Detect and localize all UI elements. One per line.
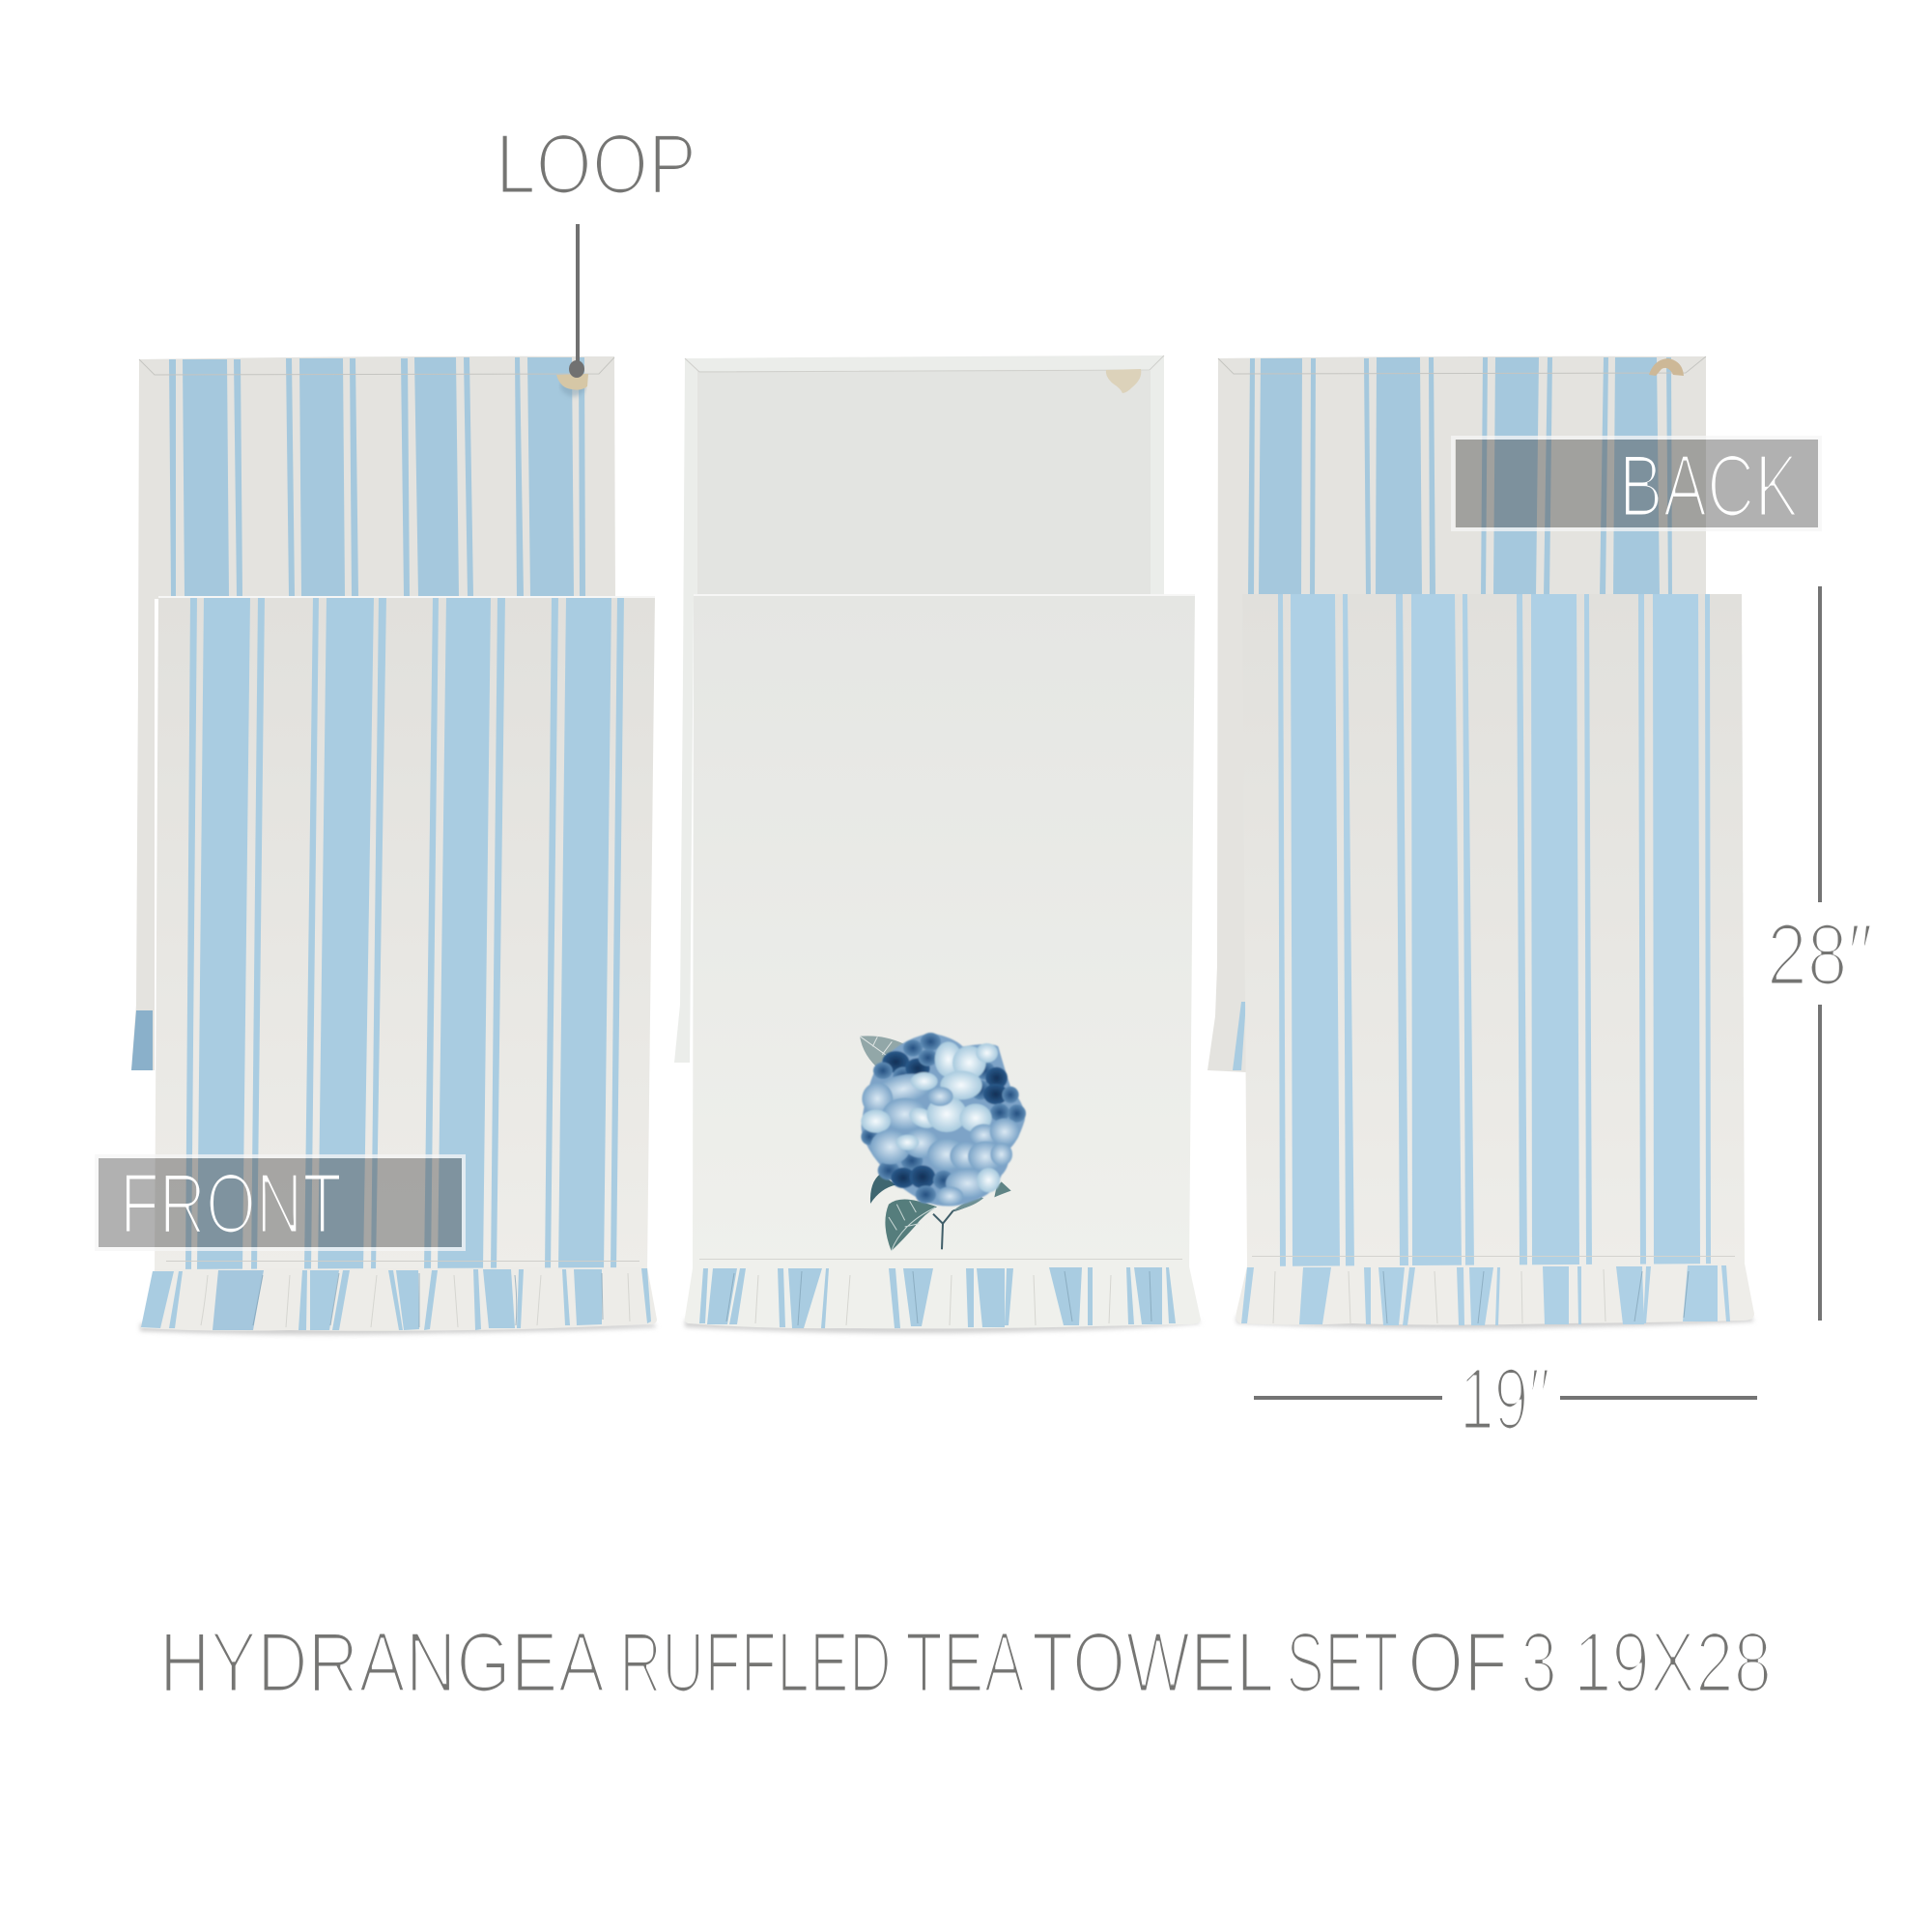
towel 1 front: striped with ruffle bbox=[140, 596, 657, 1335]
title: TOWEL bbox=[1032, 1614, 1274, 1710]
dimension: height 28 inches bbox=[1767, 586, 1873, 1321]
title: SET bbox=[1286, 1614, 1399, 1710]
title: 19X28 bbox=[1574, 1614, 1772, 1710]
dark florets bbox=[861, 1033, 1026, 1204]
title: RUFFLED bbox=[619, 1614, 892, 1710]
towel body bbox=[155, 596, 655, 1271]
towel 2 back: plain bbox=[674, 355, 1164, 1063]
loop tag towel 2 bbox=[1106, 369, 1141, 393]
loop tag towel 3 bbox=[1649, 358, 1684, 376]
dimension: width 19 inches: 19″ bbox=[1460, 1351, 1550, 1448]
badge: FRONT: FRONT bbox=[120, 1155, 342, 1251]
loop leader line with dot bbox=[569, 224, 584, 378]
towel 1 back: striped bbox=[131, 356, 615, 1070]
badge: BACK: BACK bbox=[1619, 438, 1799, 535]
ruffle bbox=[140, 1323, 657, 1335]
dimension: height 28 inches: 28″ bbox=[1767, 907, 1873, 1004]
light florets bbox=[861, 1041, 1019, 1206]
title: TEA bbox=[905, 1614, 1025, 1710]
towel 3 back: striped bbox=[1208, 356, 1706, 1072]
title bbox=[159, 1614, 1772, 1710]
ruffle bbox=[685, 1320, 1201, 1333]
base blob bbox=[862, 1033, 1025, 1207]
stem and leaves bbox=[860, 1036, 1011, 1251]
title: OF bbox=[1407, 1614, 1508, 1710]
callout: LOOP label: LOOP bbox=[496, 116, 696, 212]
ruffle bbox=[1236, 1316, 1754, 1328]
tail stripe towel 3 bbox=[1233, 1002, 1246, 1070]
flower head: blurred florets bbox=[861, 1033, 1026, 1207]
title: 3 bbox=[1520, 1614, 1557, 1710]
title: HYDRANGEA bbox=[159, 1614, 605, 1710]
dimension: width 19 inches bbox=[1254, 1351, 1757, 1448]
hydrangea flower print bbox=[860, 1033, 1026, 1251]
towel 2 front: plain with hydrangea print and ruffle bbox=[685, 594, 1201, 1333]
towel 3 front: striped with ruffle bbox=[1236, 594, 1754, 1328]
loop tag towel 1 bbox=[556, 374, 588, 397]
badge: BACK bbox=[1453, 438, 1820, 535]
tail of towel 1 bbox=[131, 1010, 153, 1070]
